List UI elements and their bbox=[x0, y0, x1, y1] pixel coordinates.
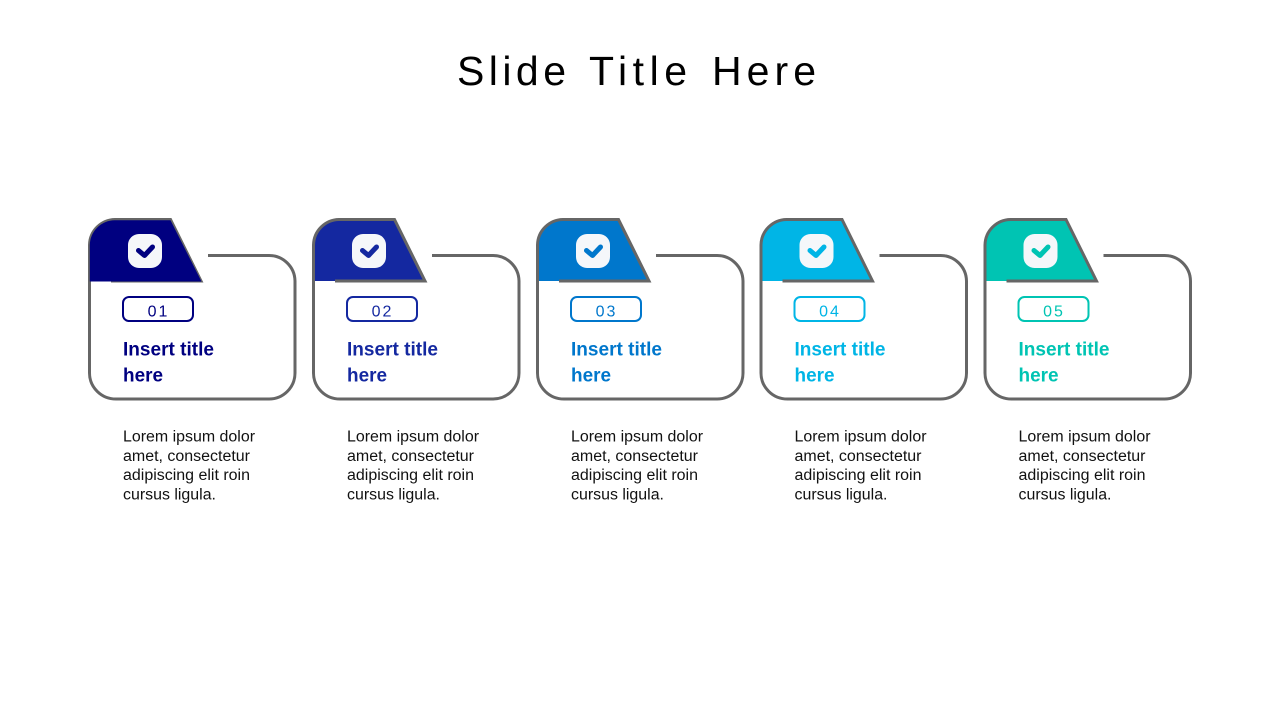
heading: here bbox=[347, 366, 387, 386]
heading: Insert title bbox=[571, 340, 662, 360]
body text: cursus ligula. bbox=[123, 486, 216, 504]
panel: step 05 bbox=[985, 220, 1190, 504]
card outline: step 05 bbox=[985, 220, 1190, 399]
tab: step 04 bbox=[761, 220, 872, 281]
heading: Insert title bbox=[347, 340, 438, 360]
heading: Insert title bbox=[794, 340, 886, 360]
body text: adipiscing elit roin bbox=[123, 467, 250, 484]
body text: Lorem ipsum dolor bbox=[123, 428, 255, 446]
heading: here bbox=[794, 366, 834, 386]
panel: step 01 bbox=[90, 220, 295, 504]
card outline: step 02 bbox=[314, 220, 519, 399]
heading: here bbox=[1018, 366, 1058, 386]
number badge bbox=[347, 297, 417, 321]
heading bbox=[347, 340, 438, 386]
body text: cursus ligula. bbox=[1018, 486, 1112, 504]
heading: Insert title bbox=[1018, 340, 1110, 360]
heading bbox=[571, 340, 662, 386]
number badge: 05 bbox=[1043, 304, 1065, 320]
body text: adipiscing elit roin bbox=[794, 467, 922, 484]
heading: Insert title bbox=[123, 340, 214, 360]
number badge: 02 bbox=[372, 304, 393, 320]
body text: cursus ligula. bbox=[571, 486, 664, 504]
number badge: 04 bbox=[819, 304, 841, 320]
body text: cursus ligula. bbox=[794, 486, 888, 504]
title: Title bbox=[589, 48, 687, 94]
body text: adipiscing elit roin bbox=[1018, 467, 1146, 484]
tab: step 05 bbox=[985, 220, 1096, 281]
card outline: step 01 bbox=[90, 220, 295, 399]
body text: Lorem ipsum dolor bbox=[571, 428, 703, 446]
panel: step 02 bbox=[314, 220, 519, 504]
icon: check badge bbox=[352, 234, 386, 268]
body text bbox=[794, 428, 926, 504]
body text: adipiscing elit roin bbox=[571, 467, 698, 484]
number badge: 03 bbox=[596, 304, 617, 320]
body text: amet, consectetur bbox=[1018, 448, 1146, 465]
body text: adipiscing elit roin bbox=[347, 467, 474, 484]
body text: Lorem ipsum dolor bbox=[1018, 428, 1150, 446]
title bbox=[457, 48, 816, 94]
body text: amet, consectetur bbox=[347, 448, 474, 465]
card outline: step 04 bbox=[761, 220, 966, 399]
number badge bbox=[571, 297, 641, 321]
panel: step 03 bbox=[538, 220, 743, 504]
number badge: 01 bbox=[148, 304, 169, 320]
number badge bbox=[1018, 297, 1088, 321]
body text: amet, consectetur bbox=[794, 448, 922, 465]
tab: step 03 bbox=[538, 220, 649, 281]
body text bbox=[1018, 428, 1150, 504]
icon: check badge bbox=[800, 234, 834, 268]
body text bbox=[123, 428, 255, 504]
body text bbox=[347, 428, 479, 504]
body text: cursus ligula. bbox=[347, 486, 440, 504]
panel: step 04 bbox=[761, 220, 966, 504]
icon: check badge bbox=[128, 234, 162, 268]
heading: here bbox=[571, 366, 611, 386]
heading: here bbox=[123, 366, 163, 386]
body text: amet, consectetur bbox=[571, 448, 698, 465]
icon: check badge bbox=[576, 234, 610, 268]
body text: Lorem ipsum dolor bbox=[347, 428, 479, 446]
title: Slide bbox=[457, 48, 566, 94]
heading bbox=[794, 340, 886, 386]
number badge bbox=[794, 297, 864, 321]
body text: amet, consectetur bbox=[123, 448, 250, 465]
heading bbox=[123, 340, 214, 386]
card outline: step 03 bbox=[538, 220, 743, 399]
heading bbox=[1018, 340, 1110, 386]
title: Here bbox=[712, 48, 816, 94]
tab: step 02 bbox=[314, 220, 425, 281]
body text: Lorem ipsum dolor bbox=[794, 428, 926, 446]
body text bbox=[571, 428, 703, 504]
tab: step 01 bbox=[90, 220, 202, 282]
icon: check badge bbox=[1024, 234, 1058, 268]
number badge bbox=[123, 297, 193, 321]
